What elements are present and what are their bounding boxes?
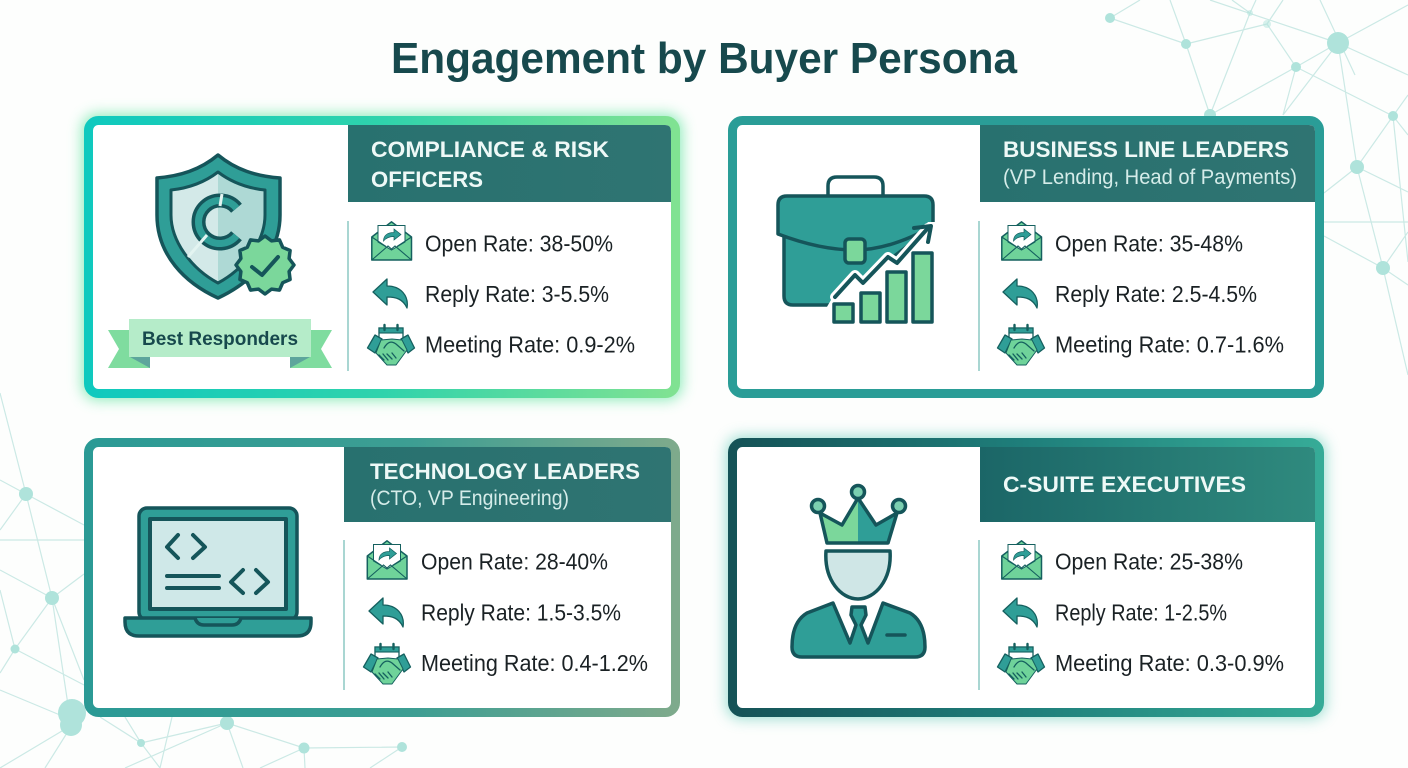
metric: open rate	[372, 222, 613, 260]
metric: open rate: Open Rate: 35-48%	[1055, 230, 1243, 256]
metric: reply rate	[369, 598, 621, 627]
metric: open rate	[367, 541, 608, 579]
header: compliance and risk officers	[348, 125, 671, 202]
header: business line leaders: BUSINESS LINE LEADERS	[1003, 137, 1289, 162]
metric: open rate: Open Rate: 28-40%	[421, 548, 608, 574]
panel: technology leaders	[88, 442, 676, 712]
metric: meeting rate: Meeting Rate: 0.7-1.6%	[1055, 332, 1284, 358]
metric: reply rate	[373, 279, 609, 308]
background: network bottom left	[0, 393, 407, 768]
metric: open rate	[1002, 541, 1243, 579]
metric: open rate: Open Rate: 25-38%	[1055, 548, 1243, 574]
icon: shield with check badge	[157, 155, 294, 298]
metric: reply rate	[1003, 598, 1227, 627]
header: c-suite executives	[980, 447, 1315, 522]
icon: executive with crown	[792, 486, 925, 657]
ribbon: best responders	[108, 319, 332, 368]
title: Engagement by Buyer Persona	[391, 34, 1018, 83]
header: compliance and risk officers: COMPLIANCE & RISK	[371, 137, 610, 162]
panel: c-suite executives	[726, 436, 1326, 719]
header: compliance and risk officers: OFFICERS	[371, 167, 483, 192]
icon: laptop with code	[125, 508, 311, 636]
header: c-suite executives: C-SUITE EXECUTIVES	[1003, 472, 1246, 497]
metric: meeting rate	[998, 325, 1284, 365]
header: business line leaders	[980, 125, 1315, 202]
metric: open rate: Open Rate: 38-50%	[425, 230, 613, 256]
header: technology leaders	[344, 447, 671, 522]
metric: open rate	[1002, 222, 1243, 260]
header: technology leaders: (CTO, VP Engineering)	[370, 487, 569, 510]
metric: meeting rate: Meeting Rate: 0.4-1.2%	[421, 650, 648, 676]
metric: reply rate: Reply Rate: 1-2.5%	[1055, 600, 1227, 626]
header: technology leaders: TECHNOLOGY LEADERS	[370, 459, 640, 484]
metric: meeting rate	[998, 644, 1284, 684]
panel: business line leaders	[732, 120, 1320, 394]
icon: briefcase with growth chart	[778, 177, 946, 330]
metric: reply rate: Reply Rate: 1.5-3.5%	[421, 600, 621, 626]
metric: reply rate: Reply Rate: 2.5-4.5%	[1055, 281, 1257, 307]
metric: reply rate	[1003, 279, 1257, 308]
metric: meeting rate: Meeting Rate: 0.3-0.9%	[1055, 650, 1284, 676]
ribbon: best responders: Best Responders	[142, 328, 298, 350]
header: business line leaders: (VP Lending, Head of Payments)	[1003, 166, 1297, 189]
background: network top right	[1105, 0, 1408, 375]
metric: meeting rate	[364, 644, 648, 684]
metric: meeting rate	[368, 325, 635, 365]
metric: reply rate: Reply Rate: 3-5.5%	[425, 281, 609, 307]
panel: compliance and risk officers	[82, 114, 682, 400]
metric: meeting rate: Meeting Rate: 0.9-2%	[425, 332, 635, 358]
